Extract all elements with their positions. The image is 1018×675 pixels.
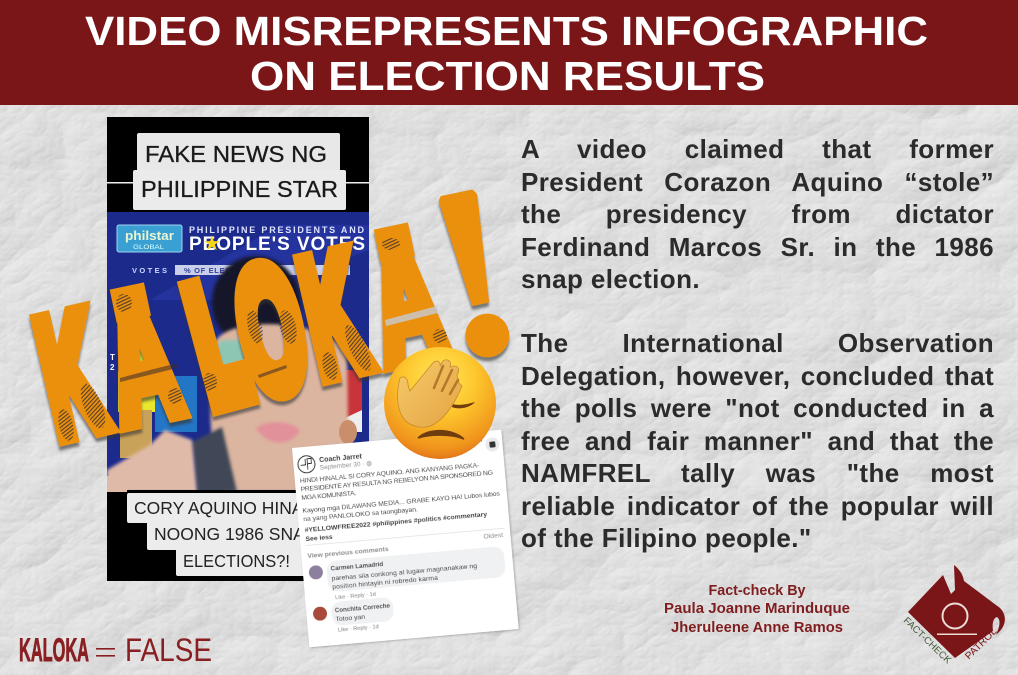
post body: Oldest [483, 532, 503, 541]
lips [256, 422, 300, 442]
paragraph: the finding: Delegation, however, concluded that [521, 360, 994, 390]
paragraph: the claim [521, 134, 994, 294]
icon: face with raised hand emoji [384, 347, 496, 459]
video graphic heading: PEOPLE'S VOTES [189, 234, 365, 255]
fact-check credits: Jheruleene Anne Ramos [671, 620, 843, 636]
stamp: KALOKA! [28, 190, 511, 452]
logo: Fact-Check Patrol: PATROL [963, 626, 1000, 662]
video caption: Cory Aquino: NOONG 1986 SNAP [154, 524, 316, 544]
video caption: fake news: PHILIPPINE STAR [141, 176, 338, 202]
mouth [418, 431, 464, 439]
post body: PRESIDENTE AY RESULTA NG REBELYON NA SPONSORED NG [300, 470, 493, 493]
post author: Coach Jarret [319, 453, 363, 464]
comment: Carmen Lamadrid: parehas sila corikong at lugaw magnanakaw ng [331, 563, 478, 583]
video caption: Cory Aquino: CORY AQUINO HINALAL [134, 498, 335, 518]
paragraph: the claim: A video claimed that former [521, 134, 994, 164]
video graphic heading: 2 [110, 363, 115, 372]
hand [398, 360, 462, 427]
paragraph: the finding: The International Observation [521, 328, 994, 358]
post body: Kayong mga DILAWANG MEDIA... GRABE KAYO HA! Lubos lubos [302, 491, 501, 515]
red panel [344, 370, 362, 418]
comment: Conchita Correche: Like · Reply · 1d [338, 624, 379, 634]
letter A: A [354, 199, 458, 401]
post body: #YELLOWFREE2022 #philippines #politics #commentary [304, 511, 488, 534]
video graphic heading: PHILIPPINE PRESIDENTS AND [189, 225, 364, 235]
scroll icon [456, 430, 500, 455]
facebook post screenshot [292, 430, 519, 647]
paragraph: the finding: free and fair manner" and that the [521, 426, 994, 456]
letter L: L [174, 252, 262, 436]
comment: Conchita Correche [312, 597, 395, 636]
legend: KALOKA = FALSE: FALSE [125, 632, 212, 668]
text block: claim and fact-check [521, 134, 994, 553]
video graphic heading: % OF ELECTORS [184, 266, 254, 275]
comment: Carmen Lamadrid [307, 536, 507, 603]
comment: Carmen Lamadrid: position hintayin ni robredo karma [332, 575, 438, 591]
comment: Carmen Lamadrid: View previous comments [307, 546, 389, 560]
presenter face [107, 256, 357, 492]
exclamation mark: ! [406, 130, 542, 412]
paragraph: the finding: the polls were "not conducted in a [521, 393, 994, 423]
video caption: fake news: FAKE NEWS NG [145, 141, 327, 167]
paragraph: the claim: President Corazon Aquino “stole” [521, 166, 994, 196]
comment: Conchita Correche: Conchita Correche [335, 603, 391, 614]
philstar logo: GLOBAL [133, 245, 165, 251]
post body: HINDI HINALAL SI CORY AQUINO. ANG KANYANG PAGKA- [300, 462, 480, 485]
comment: Conchita Correche: Totoo yan [335, 614, 366, 623]
paragraph: the finding: reliable indicator of the popular will [521, 490, 994, 520]
fact-check credits [664, 583, 850, 636]
post body: na yang PANLOLOKO sa taongbayan. [303, 506, 418, 523]
video caption: Cory Aquino: ELECTIONS?! [183, 551, 290, 571]
comment: Carmen Lamadrid: Carmen Lamadrid [330, 561, 384, 573]
eyebrow [452, 402, 475, 408]
title: VIDEO MISREPRESENTS INFOGRAPHIC [85, 8, 928, 54]
stamp torn bands [120, 306, 438, 382]
paragraph: the finding: NAMFREL tally was "the most [521, 458, 994, 488]
video graphic heading [110, 225, 365, 372]
letter K: K [287, 219, 380, 411]
legend: KALOKA = FALSE: KALOKA [19, 632, 89, 668]
letter A: A [90, 259, 194, 461]
comment: Carmen Lamadrid: Like · Reply · 1d [335, 592, 376, 601]
post author: September 30 · ◍ [320, 460, 373, 472]
post body [300, 461, 504, 556]
paragraph: the finding [521, 328, 994, 553]
video graphic heading: T [110, 353, 115, 362]
paragraph: the finding: of the Filipino people." [521, 523, 812, 553]
flag star: ★ [203, 233, 221, 255]
stamp distress marks [56, 238, 447, 442]
fact-check credits: Paula Joanne Marinduque [664, 601, 850, 617]
fact-check credits: Fact-check By [708, 583, 806, 599]
post author [297, 450, 373, 474]
letter K: K [24, 279, 117, 471]
letter O: O [220, 227, 322, 431]
yellow panel [118, 348, 155, 412]
philstar logo [117, 225, 182, 252]
header band [0, 0, 1018, 105]
paragraph: the claim: snap election. [521, 264, 700, 294]
paragraph: the claim: Ferdinand Marcos Sr. in the 1986 [521, 232, 994, 262]
post body: See less [305, 534, 333, 543]
video caption: fake news [133, 133, 346, 210]
post body: MGA KOMUNISTA. [301, 490, 357, 502]
logo wordmark: FACT-CHECK [901, 615, 954, 667]
logo: Fact-Check Patrol [901, 565, 1005, 667]
video caption: Cory Aquino [107, 476, 304, 576]
video graphic heading: VOTES [132, 266, 167, 275]
paragraph: the claim: the presidency from dictator [521, 199, 994, 229]
philstar logo: philstar [125, 228, 174, 243]
panel: video screenshot [107, 117, 369, 581]
title: ON ELECTION RESULTS [250, 53, 765, 99]
title [85, 8, 928, 99]
